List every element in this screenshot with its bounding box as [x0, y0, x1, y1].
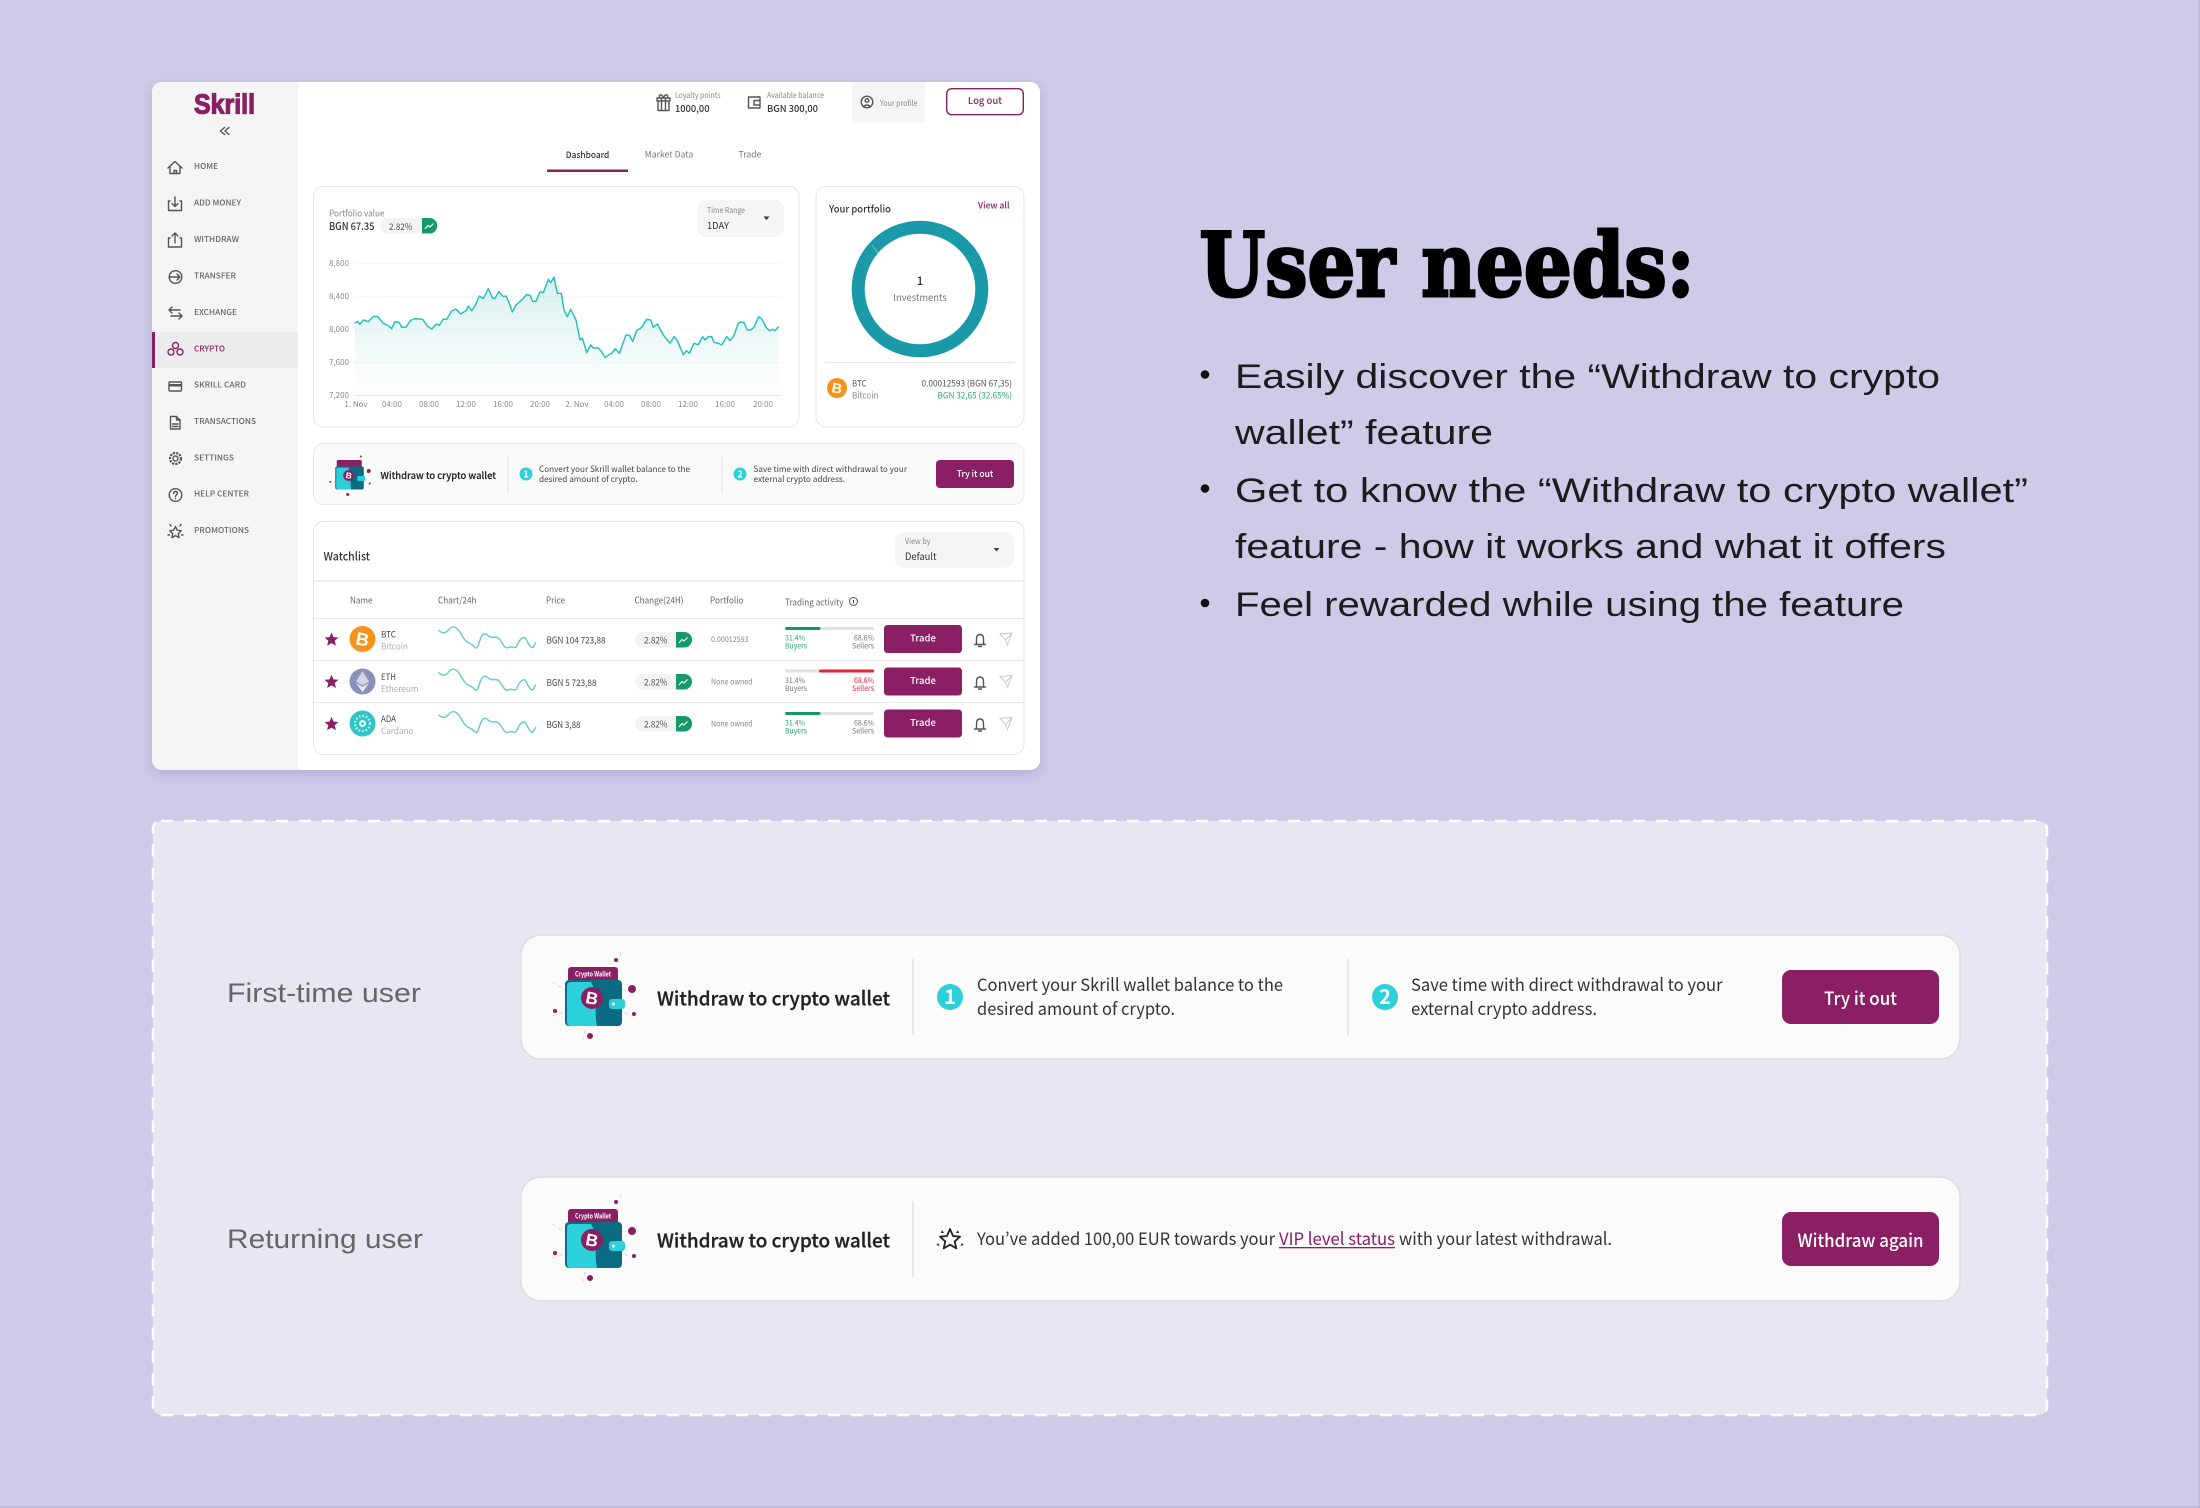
line chart: portfolio value: 7,600	[329, 357, 350, 368]
text: portfolio value: Portfolio value	[329, 206, 384, 220]
row: ADA: ADA	[381, 712, 397, 725]
step 1: Convert your Skrill wallet balance to the	[977, 971, 1283, 996]
logo: Skrill: Skrill	[194, 88, 255, 120]
icon: star reward	[936, 1229, 964, 1248]
donut chart	[858, 227, 982, 351]
nav item: promotions: PROMOTIONS	[194, 524, 249, 536]
icon: crypto wallet: Crypto Wallet	[575, 1212, 611, 1222]
row: ADA: BGN 3,88	[546, 717, 580, 731]
text: loyalty points: 1000,00	[675, 101, 710, 115]
step 2: external crypto address.	[1411, 995, 1597, 1020]
step 1	[937, 971, 1283, 1020]
icon: gift	[657, 95, 670, 110]
title: user needs: User needs:	[1200, 213, 1694, 317]
header: account bar	[657, 82, 1023, 123]
row: BTC	[325, 625, 1012, 653]
nav item: skrill card	[169, 378, 246, 391]
row: ETH: 68.6%	[854, 675, 874, 686]
row: ETH	[325, 668, 1012, 696]
row: ADA: 68.6%	[854, 718, 874, 728]
change pill	[380, 218, 437, 234]
line chart: portfolio value: 08:00	[641, 399, 662, 410]
heading: withdraw to crypto wallet: Withdraw to crypto wallet	[380, 468, 496, 482]
table header: Change(24H)	[634, 594, 684, 606]
line chart: portfolio value: 16:00	[493, 399, 514, 410]
row: ETH: Trade	[910, 673, 936, 687]
label: first-time user: First-time user	[227, 978, 421, 1008]
button: try it out: Try it out	[1824, 985, 1897, 1011]
tabs: Dashboard	[566, 148, 609, 161]
row: BTC: Buyers	[785, 640, 807, 652]
donut chart: Investments	[893, 290, 947, 304]
row: BTC: BTC	[381, 628, 396, 640]
table header: Trading activity	[785, 596, 844, 608]
heading: withdraw to crypto wallet: Withdraw to crypto wallet	[657, 1226, 890, 1254]
row: BTC: 68.6%	[854, 632, 874, 644]
text: portfolio value	[329, 206, 384, 234]
icon: crypto wallet small: B	[345, 470, 353, 481]
button: your profile: Your profile	[879, 98, 918, 109]
line chart: portfolio value: 8,000	[329, 324, 350, 335]
line chart: portfolio value	[329, 258, 781, 410]
table header: Price	[546, 594, 565, 606]
line chart: portfolio value: 7,200	[329, 390, 350, 401]
icon: crypto wallet small	[329, 456, 371, 496]
nav item: transactions	[170, 415, 256, 429]
text: loyalty points: Loyalty points	[675, 90, 721, 101]
nav item: withdraw	[168, 233, 240, 247]
line chart: portfolio value: 04:00	[382, 399, 403, 410]
tabs: Market Data	[645, 148, 693, 160]
button: try it out small: Try it out	[957, 466, 994, 480]
list: user needs bullets	[1201, 358, 2028, 624]
text: reward message: VIP level status	[1279, 1225, 1395, 1250]
row: BTC: Bitcoin	[381, 640, 408, 652]
text: reward message: You’ve added 100,00 EUR towards your	[976, 1225, 1275, 1250]
button: withdraw again	[1782, 1212, 1939, 1266]
step 2	[1372, 971, 1723, 1020]
line chart: portfolio value: 2. Nov	[565, 399, 589, 410]
panel: portfolio value chart	[314, 186, 799, 427]
button: try it out	[1782, 970, 1939, 1024]
row: ETH: BGN 5 723,88	[546, 675, 596, 689]
button: withdraw again: Withdraw again	[1798, 1227, 1924, 1253]
icon: crypto wallet: B	[584, 1230, 600, 1251]
holding row: BTC: B	[831, 379, 843, 397]
label: returning user: Returning user	[227, 1224, 423, 1254]
row: ETH: Ethereum	[381, 682, 418, 695]
text: reward message	[976, 1225, 1612, 1250]
text: reward message: with your latest withdrawal.	[1399, 1225, 1612, 1250]
dropdown: view by	[895, 532, 1014, 568]
dropdown: time range	[697, 200, 784, 237]
change pill: 2.82%	[389, 219, 413, 233]
step 1: desired amount of crypto.	[977, 995, 1175, 1020]
heading: watchlist: Watchlist	[324, 548, 370, 564]
list: user needs bullets: Easily discover the “Withdraw to crypto	[1235, 358, 1940, 396]
icon: wallet	[748, 96, 760, 108]
step 2	[734, 463, 908, 485]
line chart: portfolio value: 16:00	[715, 399, 736, 410]
list: user needs bullets: Get to know the “Withdraw to crypto wallet”	[1235, 472, 2028, 510]
nav item: exchange	[169, 306, 237, 319]
nav item: withdraw: WITHDRAW	[194, 233, 240, 245]
heading: withdraw to crypto wallet: Withdraw to crypto wallet	[657, 984, 890, 1012]
step 2: Save time with direct withdrawal to your	[1411, 971, 1723, 996]
nav item: settings: SETTINGS	[194, 452, 234, 464]
holding row: BTC	[827, 376, 1012, 402]
row: ADA: Buyers	[785, 726, 807, 736]
step 2: external crypto address.	[754, 473, 845, 485]
row: ETH: ETH	[381, 670, 396, 683]
nav item: add money: ADD MONEY	[194, 196, 241, 208]
table header: Name	[350, 594, 373, 606]
button: log out: Log out	[968, 93, 1002, 107]
panel: small feature banner	[314, 444, 1024, 504]
row: BTC: 0.00012593	[711, 634, 748, 645]
row: BTC: BGN 104 723,88	[546, 632, 606, 646]
line chart: portfolio value: 1. Nov	[344, 399, 368, 410]
row: BTC: Sellers	[852, 640, 874, 652]
nav item: crypto: CRYPTO	[194, 342, 225, 354]
banner: returning user	[521, 1177, 1960, 1301]
nav item: settings	[170, 452, 234, 464]
nav item: promotions	[168, 524, 249, 538]
row: ADA: 31.4%	[785, 718, 805, 728]
list: user needs bullets: wallet” feature	[1234, 414, 1493, 452]
line chart: portfolio value: 20:00	[753, 399, 774, 410]
nav item: transfer	[169, 270, 237, 283]
row: ETH: Buyers	[785, 683, 807, 694]
line chart: portfolio value: 8,400	[329, 291, 350, 302]
link: view all: View all	[977, 198, 1010, 212]
panel: your portfolio	[816, 186, 1024, 427]
row: ADA: 2.82%	[644, 716, 668, 730]
panel: sidebar	[152, 82, 298, 770]
step 2: Save time with direct withdrawal to your	[754, 463, 908, 475]
button: log out	[947, 89, 1023, 115]
row: BTC: B	[354, 629, 371, 650]
line chart: portfolio value: 12:00	[456, 399, 477, 410]
row: ETH: 31.4%	[785, 675, 805, 686]
step 1: desired amount of crypto.	[539, 473, 638, 485]
icon: crypto wallet: Crypto Wallet	[575, 970, 611, 980]
banner: first-time user	[521, 935, 1960, 1059]
row: ETH: 2.82%	[644, 674, 668, 688]
nav item: exchange: EXCHANGE	[194, 306, 237, 318]
step 1: 1	[944, 981, 956, 1010]
row: ADA	[325, 710, 1012, 738]
step 2: 2	[737, 466, 743, 480]
step 1: 1	[523, 466, 529, 480]
holding row: BTC: BTC	[852, 376, 867, 390]
nav item: home: HOME	[194, 160, 218, 172]
icon: crypto wallet	[552, 1194, 636, 1286]
row: ETH: Sellers	[852, 683, 874, 694]
row: ADA: Sellers	[852, 726, 874, 736]
panel: watchlist	[314, 522, 1024, 754]
list: user needs bullets: feature - how it works and what it offers	[1235, 528, 1946, 566]
button: your profile	[852, 82, 925, 123]
line chart: portfolio value: 20:00	[530, 399, 551, 410]
step 1	[520, 463, 690, 485]
line chart: portfolio value: 08:00	[419, 399, 440, 410]
row: BTC: 31.4%	[785, 632, 805, 644]
text: loyalty points	[675, 90, 721, 115]
button: try it out small	[936, 460, 1014, 488]
holding row: BTC: 0.00012593 (BGN 67,35)	[922, 376, 1012, 390]
icon: crypto wallet: B	[584, 988, 600, 1009]
text: available balance: Available balance	[767, 90, 824, 101]
dropdown: view by: View by	[905, 536, 930, 547]
nav item: add money	[168, 196, 241, 210]
dropdown: view by: Default	[905, 549, 937, 563]
line chart: portfolio value: 12:00	[678, 399, 699, 410]
heading: your portfolio: Your portfolio	[828, 200, 891, 216]
table header: Chart/24h	[438, 594, 476, 606]
panel: dashboard screenshot	[152, 82, 1040, 770]
tabs: Trade	[738, 148, 762, 160]
tabs	[547, 148, 762, 172]
holding row: BTC: BGN 32,65 (32.65%)	[938, 388, 1012, 402]
row: BTC: 2.82%	[644, 632, 668, 646]
nav item: help center	[169, 488, 250, 501]
icon: crypto wallet	[552, 952, 636, 1044]
nav item: help center: HELP CENTER	[194, 488, 250, 500]
row: ADA: None owned	[711, 718, 753, 730]
nav item: transfer: TRANSFER	[194, 270, 237, 282]
row: ADA: Cardano	[381, 724, 414, 737]
icon: collapse chevrons	[220, 128, 229, 134]
list: user needs bullets: Feel rewarded while using the feature	[1235, 586, 1904, 624]
step 1: Convert your Skrill wallet balance to the	[539, 463, 690, 475]
holding row: BTC: Bitcoin	[852, 388, 878, 402]
row: BTC: Trade	[910, 630, 936, 644]
step 2: 2	[1379, 981, 1391, 1010]
nav item: crypto	[168, 342, 225, 355]
table header: Portfolio	[710, 594, 744, 606]
line chart: portfolio value: 8,800	[329, 258, 350, 269]
text: available balance: BGN 300,00	[767, 101, 819, 115]
row: ADA: Trade	[910, 715, 936, 729]
panel: banner variants	[153, 821, 2047, 1415]
text: portfolio value: BGN 67.35	[329, 219, 374, 234]
nav item: home	[168, 160, 218, 174]
nav item: transactions: TRANSACTIONS	[194, 415, 256, 427]
table header	[350, 594, 858, 608]
donut chart: 1	[917, 273, 923, 289]
row: ETH: None owned	[711, 676, 753, 688]
line chart: portfolio value: 04:00	[604, 399, 625, 410]
nav item: skrill card: SKRILL CARD	[194, 378, 246, 390]
dropdown: time range: Time Range	[707, 205, 745, 216]
dropdown: time range: 1DAY	[707, 218, 730, 232]
text: available balance	[767, 90, 824, 115]
